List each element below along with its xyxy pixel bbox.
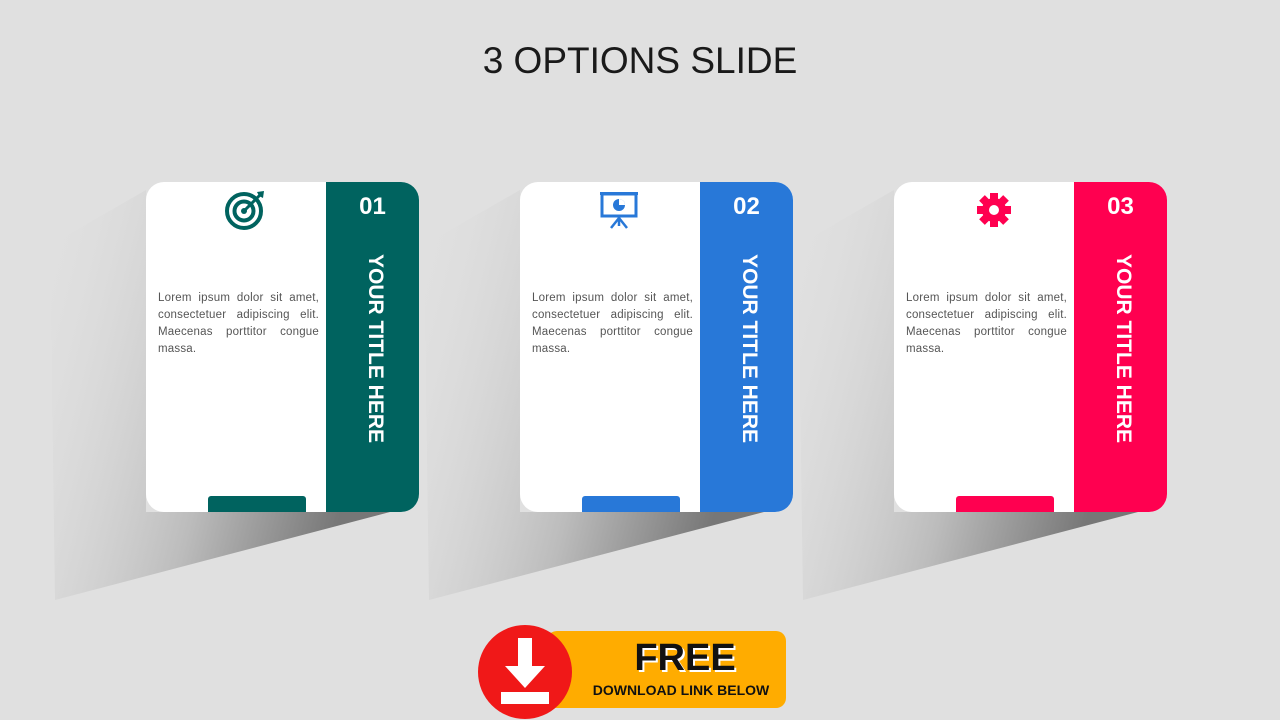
band: 03: [1107, 193, 1134, 220]
text: Lorem ipsum dolor sit amet, consectetuer adipiscing elit. Maecenas porttitor congue massa.: [532, 292, 693, 355]
band: YOUR TITLE HERE: [364, 254, 387, 443]
FREE text: FREE: [634, 637, 736, 679]
title: 3 OPTIONS SLIDE: [483, 40, 797, 81]
tab: [956, 496, 1054, 516]
text: Lorem ipsum dolor sit amet, consectetuer adipiscing elit. Maecenas porttitor congue massa.: [906, 292, 1067, 355]
band: YOUR TITLE HERE: [738, 254, 761, 443]
icon: gear: [977, 193, 1011, 227]
icon: target: [225, 191, 264, 230]
button bar: [547, 631, 786, 708]
band: [700, 182, 793, 512]
band: 01: [359, 193, 386, 220]
card 1: [146, 182, 419, 512]
icon: download circle: [478, 625, 572, 719]
card 2: [520, 182, 793, 512]
tab: [582, 496, 680, 516]
band: 02: [733, 193, 760, 220]
tab: [208, 496, 306, 516]
subtitle: DOWNLOAD LINK BELOW: [593, 682, 769, 698]
icon: presentation: [600, 192, 638, 229]
band: [326, 182, 419, 512]
card 3: [894, 182, 1167, 512]
text: Lorem ipsum dolor sit amet, consectetuer adipiscing elit. Maecenas porttitor congue massa.: [158, 292, 319, 355]
band: YOUR TITLE HERE: [1112, 254, 1135, 443]
band: [1074, 182, 1167, 512]
download button: [478, 625, 786, 719]
